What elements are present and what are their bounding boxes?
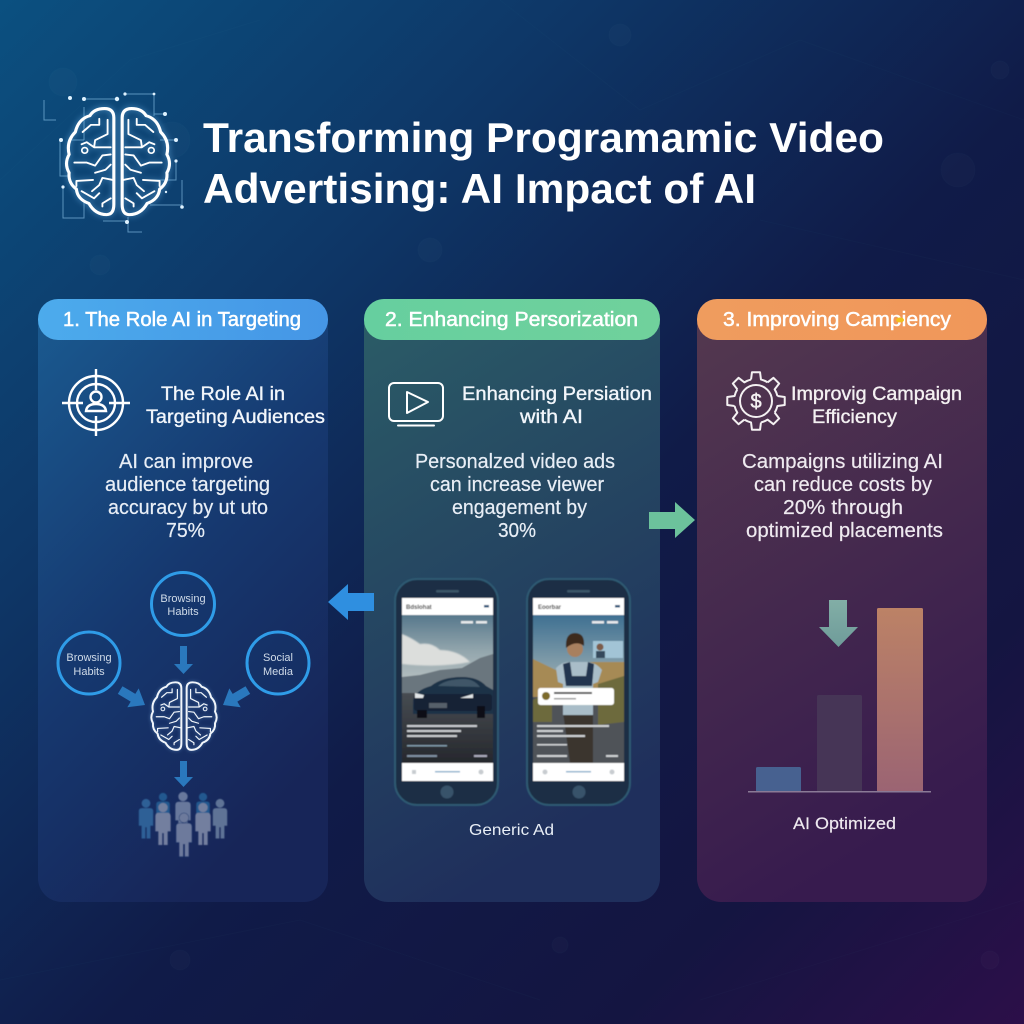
- panel 3 body text: can reduce costs by: [754, 474, 932, 496]
- panel 1 body text: AI can improve: [119, 451, 253, 473]
- title: [203, 114, 884, 212]
- data source circle: social media: Media: [263, 666, 294, 678]
- panel: 2 personalization: [364, 299, 660, 902]
- panel 3 subheading: [791, 384, 962, 428]
- panel 1 body text: [105, 451, 270, 542]
- label: generic ad: Generic Ad: [469, 822, 554, 839]
- panel 2 body text: engagement by: [452, 497, 587, 519]
- panel: 1 role of AI in targeting: [38, 299, 328, 902]
- panel 2 subheading: Enhancing Persiation: [462, 384, 652, 405]
- phone: generic ad: [395, 579, 498, 805]
- data source circle: social media: Social: [263, 652, 293, 664]
- icon: gear with dollar: [727, 372, 785, 430]
- panel 3 subheading: Improvig Campaign: [791, 384, 962, 405]
- panel 2 body text: [415, 451, 615, 542]
- arrow to audience: [174, 761, 193, 787]
- icon: brain: [151, 682, 217, 750]
- panel 2 body text: Personalzed video ads: [415, 451, 615, 473]
- arrows into brain: [114, 646, 254, 714]
- arrow: green pointing right: [649, 502, 695, 538]
- arrow: blue pointing left: [328, 584, 374, 620]
- data source circle: browsing habits top: Browsing: [160, 593, 206, 605]
- panel 3 subheading: Efficiency: [812, 407, 898, 428]
- phone: personalized ad: [527, 579, 630, 805]
- panel 3 header: [697, 299, 987, 340]
- panel 3 body text: [742, 451, 943, 542]
- panel 2 subheading: with AI: [519, 407, 583, 428]
- panel 3 body text: 20% through: [783, 497, 903, 519]
- panel 3 header: 3. Improving Campiency: [723, 309, 951, 331]
- icon: target with person: [62, 369, 130, 436]
- phone: generic ad: Bdslohat: [406, 605, 432, 611]
- panel 2 body text: 30%: [498, 520, 536, 542]
- panel: 3 campaign efficiency: [697, 299, 987, 902]
- icon: gear with dollar: $: [750, 391, 762, 413]
- data source circle: browsing habits left: Browsing: [66, 652, 112, 664]
- data source circle: browsing habits left: [58, 632, 120, 694]
- icon: header brain with circuit lines: [44, 92, 184, 232]
- panel 3 body text: Campaigns utilizing AI: [742, 451, 943, 473]
- icon: audience group: [139, 792, 227, 857]
- panel 1 body text: accuracy by ut uto: [108, 497, 268, 519]
- panel 2 subheading: [462, 384, 652, 428]
- data source circle: social media: [247, 632, 309, 694]
- panel 3 body text: optimized placements: [746, 520, 943, 542]
- panel 1 subheading: [146, 384, 325, 428]
- panel 2 header: [364, 299, 660, 340]
- title: Transforming Programamic Video: [203, 114, 884, 161]
- label: AI optimized: AI Optimized: [793, 814, 896, 833]
- data source circle: browsing habits top: Habits: [167, 606, 199, 618]
- panel 2 body text: can increase viewer: [430, 474, 604, 496]
- data source circle: browsing habits left: Habits: [73, 666, 105, 678]
- panel 1 header: 1. The Role AI in Targeting: [63, 309, 301, 331]
- panel 1 subheading: The Role AI in: [161, 384, 285, 405]
- panel 2 header: 2. Enhancing Persorization: [385, 309, 638, 331]
- data source circle: browsing habits top: [152, 572, 214, 636]
- phone: personalized ad: Eoorbar: [538, 605, 562, 611]
- title: Advertising: AI Impact of AI: [203, 165, 756, 212]
- panel 1 subheading: Targeting Audiences: [146, 407, 325, 428]
- bar chart: [748, 600, 931, 792]
- panel 1 header: [38, 299, 328, 340]
- icon: video play screen: [389, 383, 443, 426]
- panel 1 body text: 75%: [166, 520, 205, 542]
- arrow: cost reduction: [819, 600, 858, 647]
- panel 1 body text: audience targeting: [105, 474, 270, 496]
